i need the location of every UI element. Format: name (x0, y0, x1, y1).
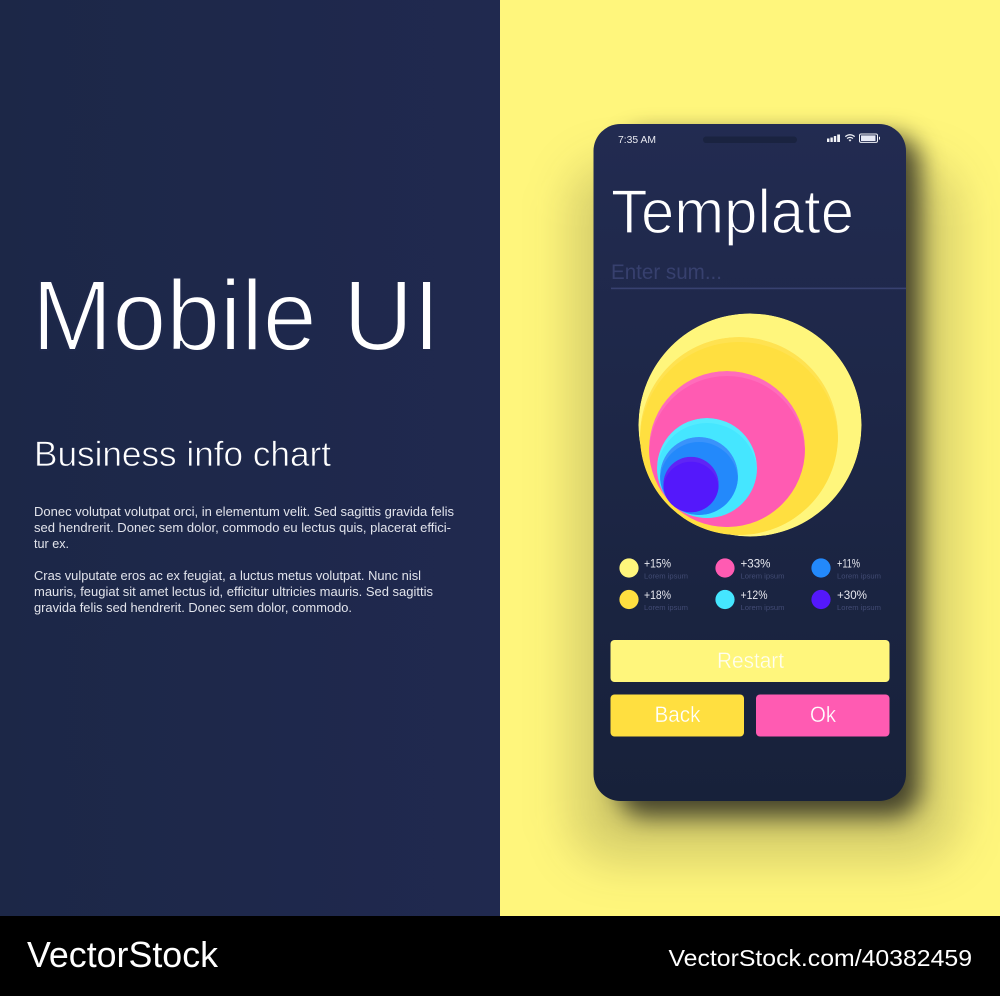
heading: Mobile UI: Mobile UI (32, 260, 440, 372)
notch (703, 136, 797, 143)
icon: wifi (845, 135, 855, 142)
legend item: +11%: Lorem ipsum (837, 572, 881, 580)
phone body (594, 124, 906, 801)
footer brand: VectorStock (27, 934, 219, 975)
icon: battery (860, 134, 880, 142)
legend item: +15%: +15% (644, 556, 671, 570)
legend (619, 556, 881, 612)
status bar (618, 134, 880, 146)
input placeholder: Enter sum... (611, 260, 722, 284)
legend item: +30%: +30% (837, 588, 867, 602)
footer image id: VectorStock.com/40382459 (668, 945, 972, 971)
legend item: +18%: Lorem ipsum (644, 603, 688, 612)
chart circle: +11% (660, 437, 738, 520)
phone shadow (572, 135, 956, 860)
button: Ok: Ok (810, 702, 837, 727)
legend item: +33% (715, 556, 784, 580)
legend item: +33%: Lorem ipsum (740, 572, 784, 580)
text block: description: mauris, feugiat sit amet lectus id, efficitur ultricies mauris. Sed sagittis (34, 585, 433, 599)
panel: right yellow background (500, 0, 1000, 916)
chart circle: +15% (638, 314, 862, 536)
legend item: +18%: +18% (644, 588, 671, 602)
legend item: +12% (715, 588, 784, 612)
chart circle: +30% (663, 457, 719, 517)
button: Back (610, 694, 744, 736)
legend item: +11%: +11% (837, 556, 860, 570)
text block: description: Cras vulputate eros ac ex feugiat, a luctus metus volutpat. Nunc nisl (34, 569, 421, 583)
text block: description (34, 505, 454, 615)
text block: description: gravida felis sed hendrerit. Donec sem dolor, commodo. (34, 601, 352, 615)
footer bar (0, 916, 1000, 996)
button: Restart (610, 640, 890, 682)
legend item: +15%: Lorem ipsum (644, 572, 688, 580)
legend item: +30% (811, 588, 881, 612)
chart circle: +12% (657, 418, 757, 523)
nested circles chart (638, 314, 862, 540)
status time: 7:35 AM (618, 135, 656, 146)
input underline (611, 288, 906, 289)
panel: left navy background (0, 0, 500, 916)
legend item: +15% (619, 556, 688, 580)
legend item: +11% (811, 556, 881, 580)
chart circle: +18% (640, 337, 838, 540)
legend item: +30%: Lorem ipsum (837, 603, 881, 612)
legend item: +33%: +33% (740, 556, 771, 570)
legend item: +12%: Lorem ipsum (740, 603, 784, 612)
button: Restart: Restart (717, 648, 784, 673)
text block: description: tur ex. (34, 537, 69, 551)
text block: description: sed hendrerit. Donec sem dolor, commodo eu lectus quis, placerat effici- (34, 521, 451, 535)
button: Ok (756, 694, 890, 736)
icon: signal (827, 134, 840, 142)
chart circle: +33% (649, 371, 805, 532)
text block: description: Donec volutpat volutpat orci, in elementum velit. Sed sagittis gravida felis (34, 505, 454, 519)
legend item: +18% (619, 588, 688, 612)
phone title: Template: Template (611, 178, 854, 247)
legend item: +12%: +12% (740, 588, 768, 602)
button: Back: Back (654, 702, 701, 727)
subheading: Business info chart: Business info chart (34, 435, 331, 474)
